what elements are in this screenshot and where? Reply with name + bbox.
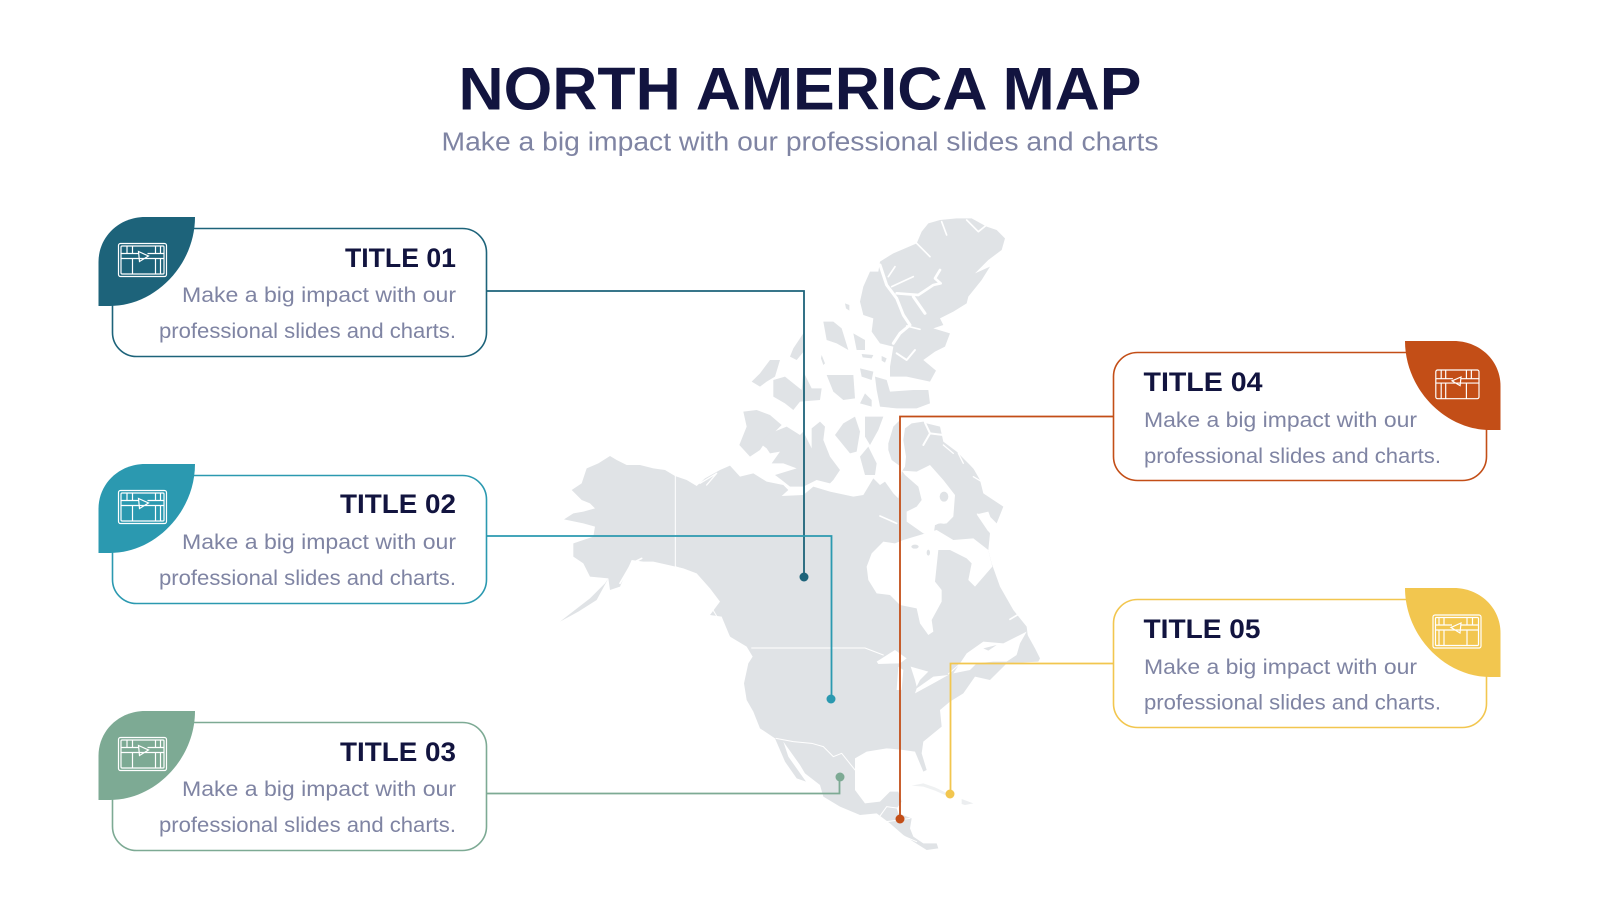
- map: north america: [560, 218, 1040, 850]
- body 02: professional slides and charts.: [159, 567, 456, 590]
- leaf badge 04: [1405, 341, 1500, 430]
- leaf badge 02: [98, 464, 195, 553]
- icon: map 02: [118, 490, 166, 524]
- heading 01: TITLE 01: [345, 243, 456, 273]
- body 04: Make a big impact with our: [1144, 409, 1417, 432]
- connector: title 03 to map: [486, 777, 840, 794]
- leaf badge 03: [98, 711, 195, 800]
- title: NORTH AMERICA MAP: [458, 56, 1142, 122]
- connector: title 05 to map: [950, 664, 1114, 794]
- body 01: professional slides and charts.: [159, 320, 456, 343]
- panel: title 04: [1114, 341, 1500, 480]
- body 04: professional slides and charts.: [1144, 445, 1441, 468]
- marker: title 01: [800, 572, 808, 582]
- heading 03: TITLE 03: [340, 737, 456, 767]
- icon: map 03: [118, 738, 166, 770]
- body 02: Make a big impact with our: [182, 531, 456, 554]
- panel: title 05: [1114, 588, 1500, 728]
- leaf badge 05: [1405, 588, 1500, 677]
- connector: title 04 to map: [900, 416, 1114, 819]
- subtitle: Make a big impact with our professional slides and charts: [442, 128, 1158, 156]
- body 03: professional slides and charts.: [159, 814, 456, 837]
- body 05: professional slides and charts.: [1144, 692, 1441, 714]
- marker: title 03: [836, 772, 844, 782]
- body 03: Make a big impact with our: [182, 778, 456, 801]
- marker: title 04: [896, 814, 904, 824]
- marker: title 02: [826, 694, 836, 704]
- heading 02: TITLE 02: [340, 489, 456, 519]
- connector: title 01 to map: [486, 291, 804, 577]
- leaf badge 01: [98, 217, 195, 306]
- heading 05: TITLE 05: [1144, 614, 1260, 644]
- icon: map 04: [1436, 370, 1479, 399]
- heading 04: TITLE 04: [1144, 367, 1263, 397]
- panel: title 03: [98, 711, 486, 850]
- marker: title 05: [946, 790, 954, 798]
- body 01: Make a big impact with our: [182, 284, 456, 307]
- icon: map 05: [1433, 615, 1481, 648]
- panel: title 02: [98, 464, 486, 604]
- body 05: Make a big impact with our: [1144, 656, 1417, 679]
- icon: map 01: [118, 244, 166, 276]
- panel: title 01: [98, 217, 486, 356]
- connector: title 02 to map: [486, 536, 832, 699]
